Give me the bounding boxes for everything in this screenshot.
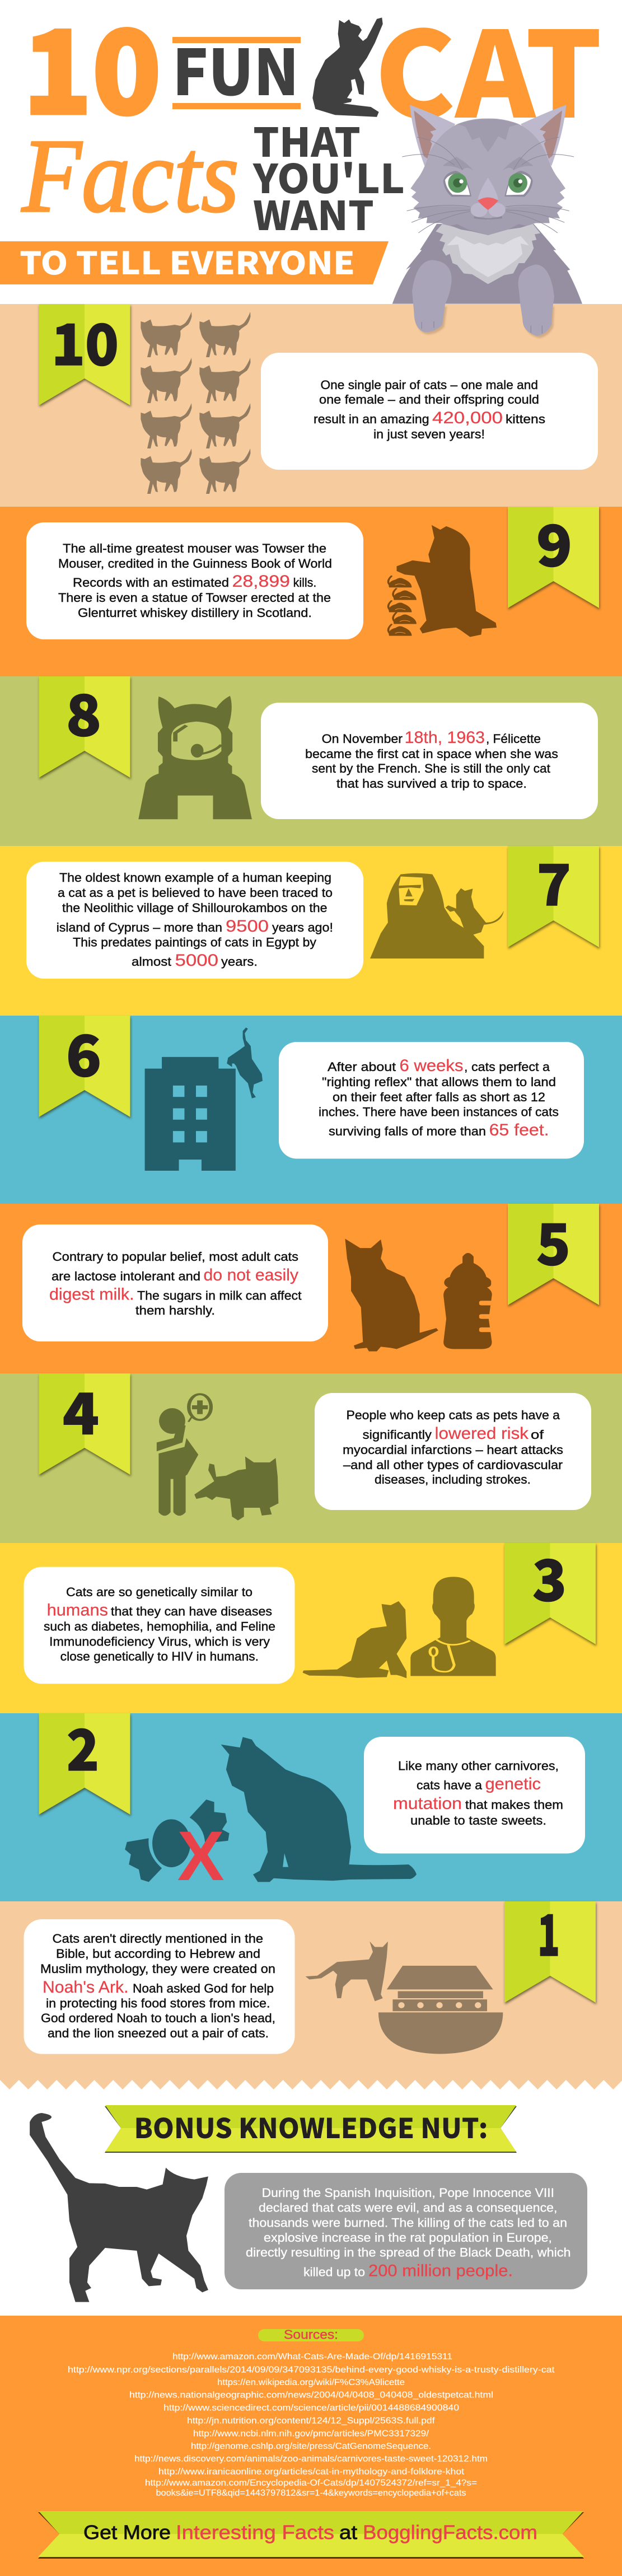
text: fact 2: that makes them [465, 1798, 563, 1812]
panel: fact 2 [0, 1705, 622, 1901]
text: fact 7: 5000 [175, 951, 218, 970]
text: fact 1: Muslim mythology, they were created on [40, 1962, 275, 1976]
text: fact 4: of [531, 1428, 544, 1442]
text: fact 3: that they can have diseases [111, 1605, 272, 1619]
icon: cat and ark [306, 1942, 503, 2054]
text: fact 5: them harshly. [135, 1303, 215, 1317]
text: source list: https://en.wikipedia.org/wiki/F%C3%A9licette [217, 2378, 405, 2387]
text: source list: http://news.discovery.com/animals/zoo-animals/carnivores-taste-sweet-120312.htm [134, 2455, 488, 2464]
text: fact 9: The all-time greatest mouser was Towser the [63, 541, 326, 555]
icon: eight cats [141, 312, 251, 494]
text: fact 5: Contrary to popular belief, most adult cats [53, 1250, 298, 1264]
panel: fact 9 [0, 501, 622, 676]
panel: fact 6 [0, 1011, 622, 1204]
text: source list: http://genome.cshlp.org/site/press/CatGenomeSequence. [191, 2442, 431, 2451]
icon: building and falling cat [145, 1027, 263, 1171]
text: bonus fact: 200 million people. [368, 2261, 513, 2280]
panel: fact 3 [0, 1536, 622, 1713]
text: fact 8: , Félicette [486, 732, 541, 746]
text: fact 1: God ordered Noah to touch a lion's head, [41, 2011, 275, 2025]
card: fact 3 [24, 1567, 294, 1684]
ribbon: number 4: 4 [63, 1369, 99, 1451]
text: fact 6: on their feet after falls as short as 12 [333, 1090, 545, 1104]
title: FUN: FUN [172, 22, 299, 114]
text: fact 1 [40, 1932, 275, 2040]
ribbon: number 8: 8 [66, 671, 101, 752]
text: fact 2 [393, 1759, 563, 1827]
text: fact 6: inches. There have been instances of cats [319, 1105, 559, 1119]
text: fact 6: After about [328, 1060, 396, 1074]
text: fact 4: People who keep cats as pets have a [346, 1408, 560, 1422]
card: fact 6 [279, 1042, 584, 1159]
icon: reaching cat silhouette [312, 17, 383, 117]
icon: astronaut cat [138, 696, 252, 819]
text: fact 7: The oldest known example of a human keeping [59, 871, 331, 885]
ribbon: number 6 [39, 1011, 131, 1119]
ribbon: number 9 [508, 501, 600, 610]
text: fact 10: result in an amazing [314, 412, 429, 426]
card: fact 7 [26, 862, 363, 979]
header [0, 0, 602, 338]
ribbon: number 5: 5 [536, 1200, 570, 1282]
text: fact 10: in just seven years! [373, 427, 485, 441]
text: fact 4: lowered risk [434, 1424, 529, 1443]
icon: red X: X [177, 1817, 225, 1895]
text: fact 7: years ago! [272, 920, 333, 934]
icon: person and cat [157, 1394, 278, 1521]
text: fact 7: This predates paintings of cats in Egypt by [73, 936, 317, 950]
text: fact 3: Immunodeficiency Virus, which is very [49, 1634, 270, 1648]
card: fact 1 [24, 1919, 294, 2054]
text: source list: http://www.npr.org/sections/parallels/2014/09/09/347093135/behind-every-good-whisky-is-a-trusty-distillery-cat [68, 2365, 555, 2374]
text: bonus fact: directly resulting in the spread of the Black Death, which [246, 2246, 571, 2260]
text: fact 3: close genetically to HIV in humans. [60, 1649, 259, 1663]
text: fact 6: , cats perfect a [464, 1060, 550, 1074]
text: fact 1: in protecting his food stores from mice. [46, 1997, 270, 2010]
banner: get more interesting facts [38, 2511, 584, 2559]
text: bonus fact: declared that cats were evil, and as a consequence, [259, 2201, 558, 2215]
text: fact 4: –and all other types of cardiovascular [343, 1458, 563, 1472]
banner: get more interesting facts: at [339, 2522, 357, 2544]
text: fact 8: On November [322, 732, 403, 746]
text: bonus fact: killed up to [303, 2265, 365, 2279]
ribbon: number 2: 2 [67, 1705, 99, 1787]
text: fact 7: almost [132, 955, 172, 969]
ribbon: number 8 [39, 671, 131, 779]
text: fact 7: a cat as a pet is believed to have been traced to [58, 886, 333, 900]
text: source list [68, 2352, 555, 2498]
icon: cat and candy [125, 1737, 417, 1882]
ribbon: number 7: 7 [537, 840, 571, 922]
text: fact 10 [314, 378, 545, 441]
text: fact 9: Records with an estimated [73, 576, 229, 590]
ribbon: number 10 [39, 300, 131, 407]
text: fact 5: The sugars in milk can affect [137, 1289, 302, 1303]
text: fact 6: 6 weeks [400, 1056, 464, 1075]
ribbon: number 6: 6 [66, 1011, 101, 1093]
banner: get more interesting facts: BogglingFacts.com [363, 2522, 537, 2544]
ribbon: number 10: 10 [52, 300, 119, 382]
card: fact 10 [261, 353, 598, 470]
text: fact 4 [343, 1408, 563, 1486]
card: bonus fact [225, 2173, 587, 2289]
text: fact 2: Like many other carnivores, [398, 1759, 559, 1773]
text: fact 4: significantly [363, 1428, 432, 1442]
nose [478, 197, 498, 210]
card: fact 5 [22, 1224, 328, 1341]
text: source list: http://www.sciencedirect.com/science/article/pii/0014488684900840 [163, 2404, 459, 2413]
panel: footer [0, 2316, 622, 2576]
text: fact 2: unable to taste sweets. [410, 1813, 546, 1827]
ribbon: number 3: 3 [532, 1536, 567, 1617]
ribbon: number 7 [508, 840, 600, 949]
text: source list: http://www.ncbi.nlm.nih.gov/pmc/articles/PMC3317329/ [193, 2429, 429, 2439]
text: fact 7: years. [221, 955, 258, 969]
paws [412, 260, 554, 338]
panel: fact 5 [0, 1200, 622, 1373]
text: fact 4: diseases, including strokes. [375, 1472, 531, 1486]
text: fact 9 [58, 541, 332, 620]
text: fact 3: humans [47, 1601, 108, 1620]
banner: bonus knowledge nut: BONUS KNOWLEDGE NUT: [134, 2107, 488, 2147]
text: fact 1: Cats aren't directly mentioned in the [53, 1932, 263, 1946]
banner: to tell everyone: TO TELL EVERYONE [20, 239, 355, 284]
panel: bonus knowledge nut [30, 2105, 587, 2302]
ribbon: number 4 [39, 1369, 131, 1476]
text: source list: http://jn.nutrition.org/content/124/12_Suppl/2563S.full.pdf [187, 2416, 435, 2426]
icon: cat and veterinarian [303, 1577, 496, 1679]
panel: fact 7 [0, 840, 622, 1016]
text: fact 5: do not easily [204, 1266, 298, 1284]
title: Facts: Facts [21, 117, 239, 234]
banner: get more interesting facts: Interesting Facts [176, 2522, 334, 2544]
left eye [443, 171, 471, 197]
text: fact 1: and the lion sneezed out a pair of cats. [48, 2026, 269, 2040]
text: fact 10: one female – and their offspring could [319, 392, 539, 406]
card: fact 2 [364, 1737, 585, 1853]
text: fact 7: 9500 [226, 917, 269, 936]
text: fact 8 [305, 728, 558, 791]
icon: sphinx and cat [370, 873, 504, 959]
text: fact 8: sent by the French. She is still the only cat [312, 761, 551, 775]
text: fact 2: genetic [485, 1775, 541, 1793]
banner: get more interesting facts: Get More [83, 2522, 171, 2544]
panel: fact 4 [0, 1369, 622, 1543]
text: fact 5: are lactose intolerant and [52, 1269, 200, 1283]
title: fun bars [172, 37, 301, 109]
text: fact 7: island of Cyprus – more than [57, 920, 222, 934]
text: fact 6: surviving falls of more than [329, 1124, 486, 1138]
title: that you'll want: YOU'LL [252, 148, 405, 205]
text: bonus fact: During the Spanish Inquisition, Pope Innocence VIII [262, 2186, 554, 2200]
title: that you'll want: WANT [253, 185, 374, 242]
icon: cat with mice [389, 525, 497, 637]
text: fact 9: kills. [293, 576, 316, 590]
text: fact 9: Mouser, credited in the Guinness Book of World [58, 557, 332, 571]
text: fact 9: Glenturret whiskey distillery in Scotland. [78, 606, 312, 620]
text: source list: http://www.iranicaonline.org/articles/cat-in-mythology-and-folklore-khot [158, 2467, 465, 2477]
panel: fact 8 [0, 671, 622, 846]
label: sources [258, 2327, 364, 2342]
text: fact 6: 65 feet. [489, 1121, 549, 1139]
text: bonus fact [246, 2186, 571, 2280]
text: fact 1: Bible, but according to Hebrew and [56, 1947, 260, 1961]
title: that you'll want [252, 111, 405, 242]
right eye [504, 171, 533, 197]
text: fact 9: There is even a statue of Towser erected at the [58, 591, 331, 605]
text: fact 10: kittens [506, 412, 545, 426]
icon: cat and milk bottle [345, 1239, 493, 1352]
text: fact 7 [57, 871, 333, 970]
text: fact 2: mutation [393, 1794, 462, 1813]
panel: fact 10 [0, 300, 622, 507]
illustration: kitten [392, 105, 582, 338]
ribbon: number 2 [39, 1705, 131, 1816]
title: that you'll want: THAT [253, 111, 361, 169]
text: fact 10: One single pair of cats – one male and [320, 378, 538, 392]
ribbon: number 1 [504, 1891, 596, 2004]
text: fact 8: 18th, 1963 [405, 728, 485, 747]
ribbon: number 5 [508, 1200, 600, 1307]
text: fact 4: myocardial infarctions – heart attacks [343, 1443, 563, 1457]
ribbon: number 9: 9 [536, 501, 572, 583]
text: fact 3: Cats are so genetically similar to [66, 1585, 252, 1599]
text: fact 5: digest milk. [49, 1285, 134, 1304]
ribbon: number 1: 1 [537, 1891, 560, 1972]
text: bonus fact: thousands were burned. The killing of the cats led to an [249, 2216, 567, 2230]
text: fact 8: that has survived a trip to space. [336, 777, 527, 791]
text: bonus fact: explosive increase in the rat population in Europe, [264, 2231, 552, 2245]
text: source list: http://www.amazon.com/Encyclopedia-Of-Cats/dp/1407524372/ref=sr_1_4?s= [145, 2479, 477, 2488]
text: source list: books&ie=UTF8&qid=1443797812&sr=1-4&keywords=encyclopedia+of+cats [156, 2489, 466, 2498]
text: fact 1: Noah's Ark. [43, 1978, 129, 1997]
text: fact 5 [49, 1250, 302, 1317]
label: sources: Sources: [284, 2327, 338, 2342]
card: fact 9 [26, 522, 363, 639]
text: fact 1: Noah asked God for help [133, 1981, 274, 1995]
text: fact 6: "righting reflex" that allows them to land [322, 1075, 556, 1089]
card: fact 4 [315, 1393, 591, 1510]
text: fact 2: cats have a [417, 1778, 482, 1792]
text: fact 3: such as diabetes, hemophilia, and Feline [44, 1619, 275, 1634]
text: fact 6 [319, 1056, 559, 1139]
text: fact 3 [44, 1585, 275, 1663]
text: fact 7: the Neolithic village of Shillourokambos on the [62, 901, 327, 915]
text: source list: http://www.amazon.com/What-Cats-Are-Made-Of/dp/1416915311 [172, 2352, 452, 2362]
text: source list: http://news.nationalgeographic.com/news/2004/04/0408_040408_oldestpetcat.html [129, 2391, 493, 2400]
text: fact 8: became the first cat in space when she was [305, 747, 558, 761]
ribbon: number 3 [504, 1536, 596, 1646]
icon: cat from behind [30, 2113, 208, 2302]
panel: fact 1 [0, 1891, 622, 2089]
text: fact 9: 28,899 [232, 572, 290, 591]
card: fact 8 [261, 703, 598, 819]
text: fact 10: 420,000 [432, 409, 503, 427]
